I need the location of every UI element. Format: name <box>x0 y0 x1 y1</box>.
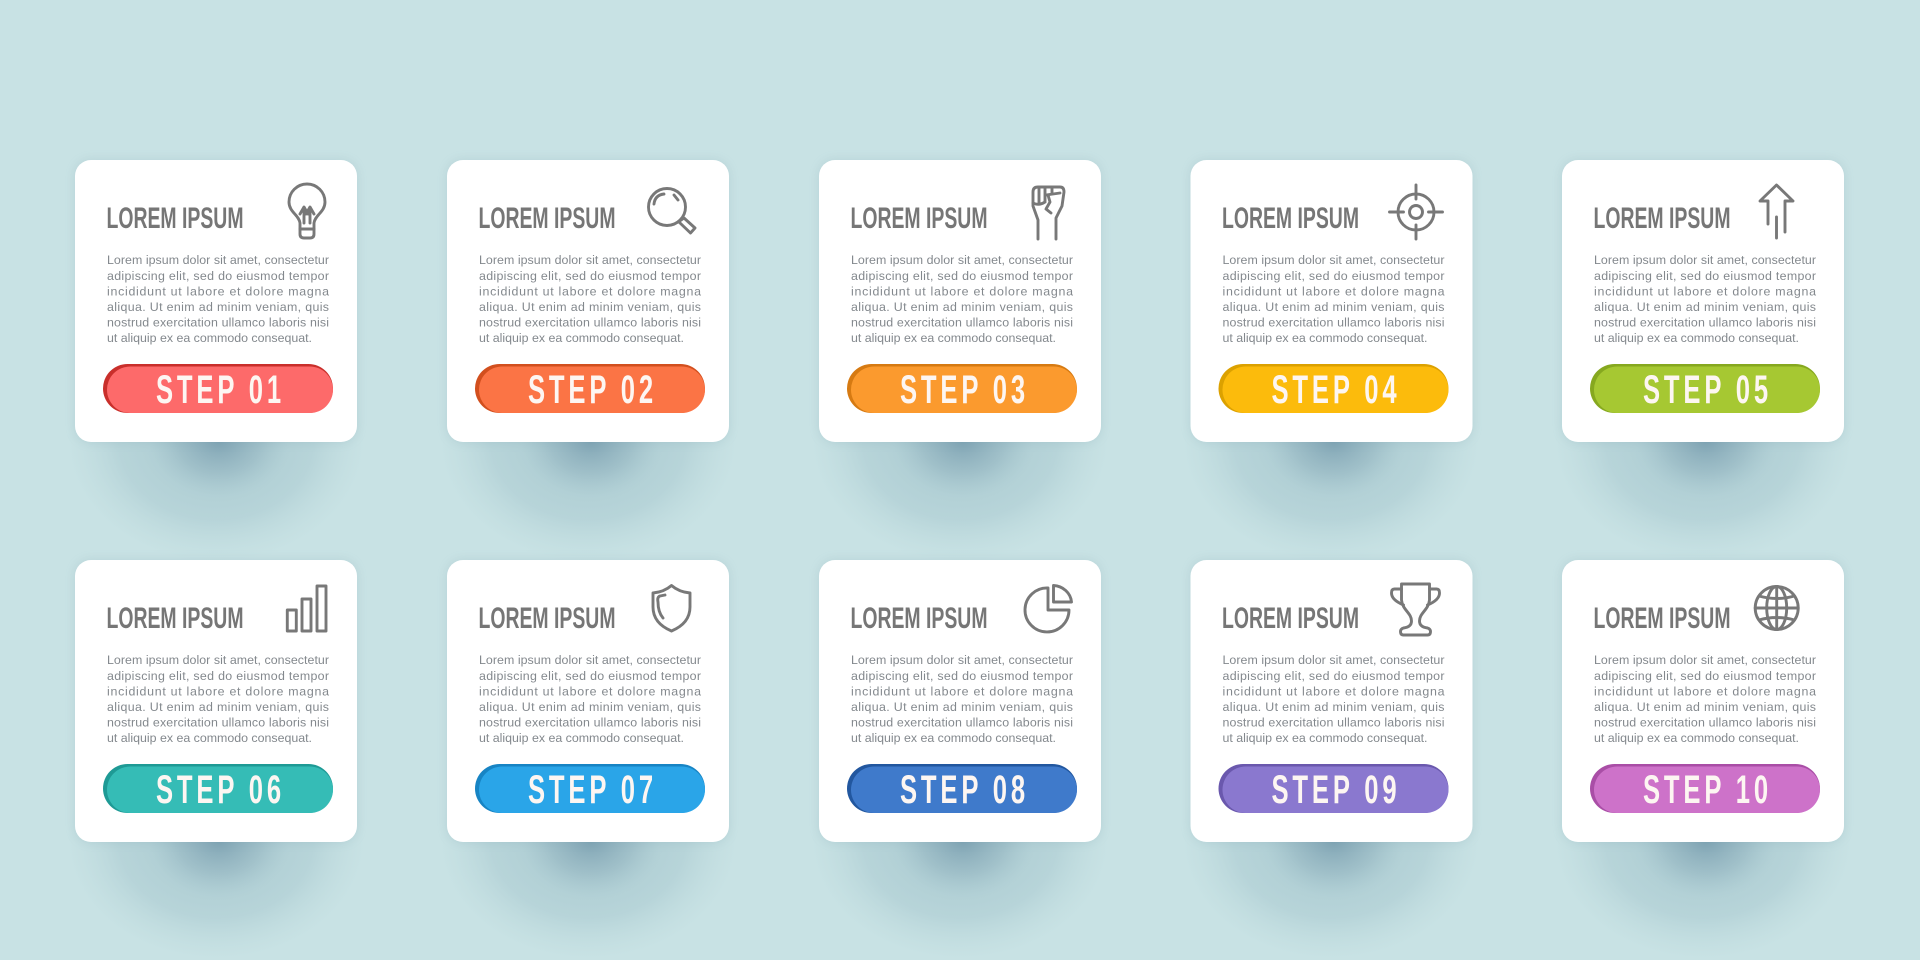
text block: step 06 description: adipiscing elit, sed do eiusmod tempor <box>107 669 329 683</box>
text block: step 09 description: aliqua. Ut enim ad minim veniam, quis <box>1222 700 1444 714</box>
text block: step 08 description: adipiscing elit, sed do eiusmod tempor <box>851 669 1073 683</box>
text block: step 04 description: adipiscing elit, sed do eiusmod tempor <box>1222 269 1444 283</box>
step pill: step 01: STEP 01 <box>156 368 285 412</box>
step pill: step 08 <box>847 764 1077 813</box>
heading: step 07: LOREM IPSUM <box>478 602 616 635</box>
panel: step 05 <box>1562 160 1844 442</box>
text block: step 05 description: nostrud exercitation ullamco laboris nisi <box>1594 316 1816 330</box>
step pill: step 01 <box>103 364 333 413</box>
text block: step 09 description: ut aliquip ex ea commodo consequat. <box>1222 731 1428 745</box>
text block: step 05 description: incididunt ut labore et dolore magna <box>1594 284 1816 298</box>
text block: step 05 description: ut aliquip ex ea commodo consequat. <box>1594 331 1799 345</box>
text block: step 10 description: aliqua. Ut enim ad minim veniam, quis <box>1594 700 1816 714</box>
text block: step 01 description: ut aliquip ex ea commodo consequat. <box>107 331 312 345</box>
text block: step 04 description <box>1222 253 1445 345</box>
text block: step 04 description: nostrud exercitation ullamco laboris nisi <box>1222 316 1444 330</box>
heading: step 10: LOREM IPSUM <box>1594 602 1730 635</box>
text block: step 09 description: nostrud exercitation ullamco laboris nisi <box>1222 716 1444 730</box>
text block: step 07 description: incididunt ut labore et dolore magna <box>479 684 701 698</box>
step pill: step 06: STEP 06 <box>156 768 285 812</box>
icon: magnifying glass <box>648 188 695 233</box>
panel: step 03 <box>819 160 1101 442</box>
text block: step 02 description: ut aliquip ex ea commodo consequat. <box>479 331 684 345</box>
text block: step 05 description: adipiscing elit, sed do eiusmod tempor <box>1594 269 1816 283</box>
icon: raised fist <box>1033 187 1064 239</box>
step pill: step 04: STEP 04 <box>1272 368 1400 412</box>
text block: step 08 description: Lorem ipsum dolor sit amet, consectetur <box>851 653 1073 667</box>
step pill: step 02 <box>475 364 705 413</box>
step pill: step 05: STEP 05 <box>1643 368 1772 412</box>
text block: step 05 description: Lorem ipsum dolor sit amet, consectetur <box>1594 253 1816 267</box>
step pill: step 04 <box>1218 364 1448 413</box>
text block: step 01 description: incididunt ut labore et dolore magna <box>107 284 329 298</box>
text block: step 10 description: incididunt ut labore et dolore magna <box>1594 684 1816 698</box>
text block: step 02 description: nostrud exercitation ullamco laboris nisi <box>479 316 701 330</box>
text block: step 02 description: adipiscing elit, sed do eiusmod tempor <box>479 269 701 283</box>
text block: step 09 description: Lorem ipsum dolor sit amet, consectetur <box>1222 653 1444 667</box>
icon: light bulb <box>289 184 325 238</box>
text block: step 01 description <box>107 253 329 345</box>
panel: step 07 <box>447 560 729 842</box>
text block: step 07 description: adipiscing elit, sed do eiusmod tempor <box>479 669 701 683</box>
text block: step 08 description <box>851 653 1073 745</box>
text block: step 03 description <box>851 253 1073 345</box>
text block: step 08 description: aliqua. Ut enim ad minim veniam, quis <box>851 700 1073 714</box>
text block: step 07 description: aliqua. Ut enim ad minim veniam, quis <box>479 700 701 714</box>
text block: step 08 description: nostrud exercitation ullamco laboris nisi <box>851 716 1073 730</box>
step pill: step 09: STEP 09 <box>1272 768 1400 812</box>
icon: up arrow <box>1760 185 1793 238</box>
text block: step 03 description: ut aliquip ex ea commodo consequat. <box>851 331 1056 345</box>
text block: step 09 description: adipiscing elit, sed do eiusmod tempor <box>1222 669 1444 683</box>
panel: step 06 <box>75 560 357 842</box>
panel: step 04 <box>1190 160 1472 442</box>
heading: step 01: LOREM IPSUM <box>106 202 244 235</box>
icon: pie chart <box>1025 586 1072 632</box>
step pill: step 08: STEP 08 <box>900 768 1029 812</box>
step pill: step 10: STEP 10 <box>1643 768 1772 812</box>
text block: step 06 description: incididunt ut labore et dolore magna <box>107 684 329 698</box>
heading: step 08: LOREM IPSUM <box>850 602 988 635</box>
text block: step 02 description <box>479 253 701 345</box>
text block: step 09 description: incididunt ut labore et dolore magna <box>1222 684 1445 698</box>
text block: step 01 description: aliqua. Ut enim ad minim veniam, quis <box>107 300 329 314</box>
text block: step 10 description: nostrud exercitation ullamco laboris nisi <box>1594 716 1816 730</box>
text block: step 05 description: aliqua. Ut enim ad minim veniam, quis <box>1594 300 1816 314</box>
text block: step 07 description: nostrud exercitation ullamco laboris nisi <box>479 716 701 730</box>
text block: step 08 description: incididunt ut labore et dolore magna <box>851 684 1073 698</box>
heading: step 03: LOREM IPSUM <box>850 202 988 235</box>
text block: step 07 description: ut aliquip ex ea commodo consequat. <box>479 731 684 745</box>
text block: step 01 description: Lorem ipsum dolor sit amet, consectetur <box>107 253 329 267</box>
text block: step 10 description <box>1594 653 1816 745</box>
icon: shield <box>653 586 690 631</box>
text block: step 03 description: incididunt ut labore et dolore magna <box>851 284 1073 298</box>
text block: step 10 description: ut aliquip ex ea commodo consequat. <box>1594 731 1799 745</box>
text block: step 02 description: Lorem ipsum dolor sit amet, consectetur <box>479 253 701 267</box>
heading: step 09: LOREM IPSUM <box>1222 602 1359 635</box>
text block: step 01 description: nostrud exercitation ullamco laboris nisi <box>107 316 329 330</box>
text block: step 03 description: Lorem ipsum dolor sit amet, consectetur <box>851 253 1073 267</box>
step pill: step 03: STEP 03 <box>900 368 1029 412</box>
panel: step 09 <box>1190 560 1472 842</box>
text block: step 09 description <box>1222 653 1445 745</box>
text block: step 08 description: ut aliquip ex ea commodo consequat. <box>851 731 1056 745</box>
text block: step 04 description: Lorem ipsum dolor sit amet, consectetur <box>1222 253 1444 267</box>
panel: step 01 <box>75 160 357 442</box>
text block: step 06 description: Lorem ipsum dolor sit amet, consectetur <box>107 653 329 667</box>
text block: step 03 description: nostrud exercitation ullamco laboris nisi <box>851 316 1073 330</box>
text block: step 02 description: incididunt ut labore et dolore magna <box>479 284 701 298</box>
panel: step 10 <box>1562 560 1844 842</box>
step pill: step 02: STEP 02 <box>528 368 657 412</box>
text block: step 06 description: aliqua. Ut enim ad minim veniam, quis <box>107 700 329 714</box>
heading: step 05: LOREM IPSUM <box>1594 202 1730 235</box>
heading: step 02: LOREM IPSUM <box>478 202 616 235</box>
text block: step 10 description: Lorem ipsum dolor sit amet, consectetur <box>1594 653 1816 667</box>
step pill: step 03 <box>847 364 1077 413</box>
icon: globe <box>1755 586 1798 630</box>
text block: step 07 description: Lorem ipsum dolor sit amet, consectetur <box>479 653 701 667</box>
text block: step 06 description <box>107 653 329 745</box>
step pill: step 10 <box>1590 764 1820 813</box>
step pill: step 07: STEP 07 <box>528 768 657 812</box>
text block: step 04 description: ut aliquip ex ea commodo consequat. <box>1222 331 1428 345</box>
text block: step 01 description: adipiscing elit, sed do eiusmod tempor <box>107 269 329 283</box>
step pill: step 05 <box>1590 364 1820 413</box>
text block: step 06 description: ut aliquip ex ea commodo consequat. <box>107 731 312 745</box>
icon: bar chart <box>287 586 326 631</box>
panel: step 08 <box>819 560 1101 842</box>
text block: step 10 description: adipiscing elit, sed do eiusmod tempor <box>1594 669 1816 683</box>
step pill: step 09 <box>1218 764 1448 813</box>
text block: step 06 description: nostrud exercitation ullamco laboris nisi <box>107 716 329 730</box>
step pill: step 06 <box>103 764 333 813</box>
text block: step 03 description: aliqua. Ut enim ad minim veniam, quis <box>851 300 1073 314</box>
text block: step 02 description: aliqua. Ut enim ad minim veniam, quis <box>479 300 701 314</box>
text block: step 05 description <box>1594 253 1816 345</box>
heading: step 06: LOREM IPSUM <box>106 602 244 635</box>
text block: step 07 description <box>479 653 701 745</box>
step pill: step 07 <box>475 764 705 813</box>
panel: step 02 <box>447 160 729 442</box>
text block: step 04 description: incididunt ut labore et dolore magna <box>1222 284 1445 298</box>
text block: step 03 description: adipiscing elit, sed do eiusmod tempor <box>851 269 1073 283</box>
text block: step 04 description: aliqua. Ut enim ad minim veniam, quis <box>1222 300 1444 314</box>
icon: target <box>1390 185 1442 239</box>
heading: step 04: LOREM IPSUM <box>1222 202 1359 235</box>
icon: trophy <box>1392 584 1440 635</box>
